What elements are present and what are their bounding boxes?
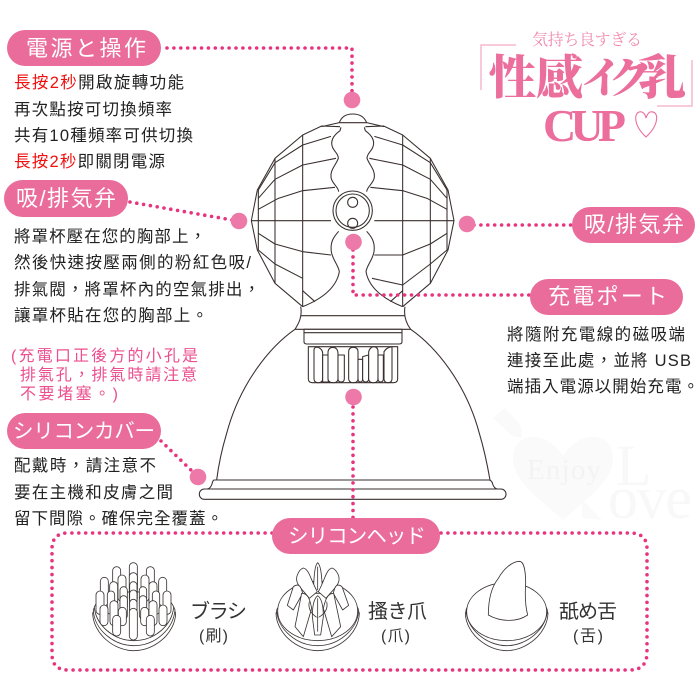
logo title: 性 [489, 41, 536, 108]
device cup dome [199, 307, 506, 499]
icon: tongue head [465, 561, 548, 651]
text: charging instructions: 連接至此處，並將 USB [507, 351, 691, 370]
icon: claw head [276, 563, 359, 651]
text: power instructions: 再次點按可切換頻率 [14, 100, 172, 119]
label: tongue [559, 600, 617, 645]
icon: brush head [93, 563, 176, 651]
dotted frame: silicone heads [52, 533, 647, 670]
text: cover instructions: 要在主機和皮膚之間 [14, 483, 173, 502]
label: silicone cover: シリコンカバー [13, 420, 155, 443]
connector: left valve [130, 202, 232, 220]
text: cover instructions [14, 456, 223, 528]
label: brush: ブラシ [190, 599, 247, 623]
label: claw: 搔き爪 [368, 600, 427, 623]
connector: silicone cover [161, 441, 192, 471]
label: claw: (爪) [381, 628, 410, 645]
text: pink note: (充電口正後方的小孔是 [11, 347, 198, 365]
connector: power to device [167, 48, 352, 92]
watermark: Enjoy Love [493, 408, 692, 531]
label: tongue: 舐め舌 [559, 600, 617, 623]
text: power instructions: 共有10種頻率可供切換 [14, 126, 193, 145]
text: charging instructions: 端插入電源以開始充電。 [507, 377, 699, 396]
text: charging instructions [507, 325, 699, 396]
watermark: Enjoy Love: Enjoy [527, 454, 602, 486]
label: suction valve right: 吸/排気弁 [584, 212, 684, 237]
text: valve instructions: 然後快速按壓兩側的粉紅色吸/ [14, 253, 251, 272]
device head globe [251, 114, 454, 307]
text: pink note: 排氣孔，排氣時請注意 [20, 365, 197, 384]
marker dots [190, 92, 475, 485]
text: cover instructions: 留下間隙。確保完全覆蓋。 [14, 509, 223, 528]
device illustration [199, 114, 506, 499]
label: tongue: (舌) [573, 628, 603, 645]
logo title: 感 [536, 41, 583, 108]
text: pink note [11, 347, 198, 403]
label: silicone head [272, 518, 440, 554]
logo title: 乳 [638, 39, 686, 108]
text: valve instructions [14, 227, 260, 325]
connector: silicone head [351, 407, 355, 518]
label: silicone head: シリコンヘッド [288, 525, 426, 548]
label: suction valve left: 吸/排気弁 [16, 186, 116, 211]
label: suction valve left [4, 180, 128, 217]
watermark: Enjoy Love: ove [608, 465, 692, 531]
text: pink note: 不要堵塞。) [20, 385, 118, 403]
logo title: イ [581, 46, 623, 106]
connector: charging port [353, 250, 530, 295]
label: charging port [530, 279, 683, 315]
text: cover instructions: 配戴時，請注意不 [14, 456, 156, 475]
text: valve instructions: 讓罩杯貼在您的胸部上。 [14, 305, 208, 325]
text: power instructions: 長按2秒即關閉電源 [14, 152, 165, 171]
text: valve instructions: 將罩杯壓在您的胸部上， [14, 227, 206, 246]
connector: right valve [474, 223, 572, 227]
label: suction valve right [572, 207, 695, 243]
label: silicone cover [7, 413, 161, 449]
text: valve instructions: 排氣閥，將罩杯內的空氣排出， [14, 280, 260, 299]
logo title [481, 27, 692, 151]
label: charging port: 充電ポート [548, 284, 667, 309]
label: brush [190, 599, 247, 645]
logo title: ク [609, 46, 651, 106]
text: power instructions: 長按2秒開啟旋轉功能 [14, 73, 184, 92]
text: power instructions [14, 73, 193, 171]
watermark: Enjoy Love: L [616, 433, 651, 498]
logo title: CUP [543, 100, 626, 151]
label: claw [368, 600, 427, 645]
label: brush: (刷) [199, 627, 228, 645]
label: power and operation [7, 30, 161, 66]
text: charging instructions: 將隨附充電線的磁吸端 [507, 325, 685, 344]
logo title: 気持ち良すぎる [532, 27, 642, 50]
label: power and operation: 電源と操作 [26, 36, 146, 61]
